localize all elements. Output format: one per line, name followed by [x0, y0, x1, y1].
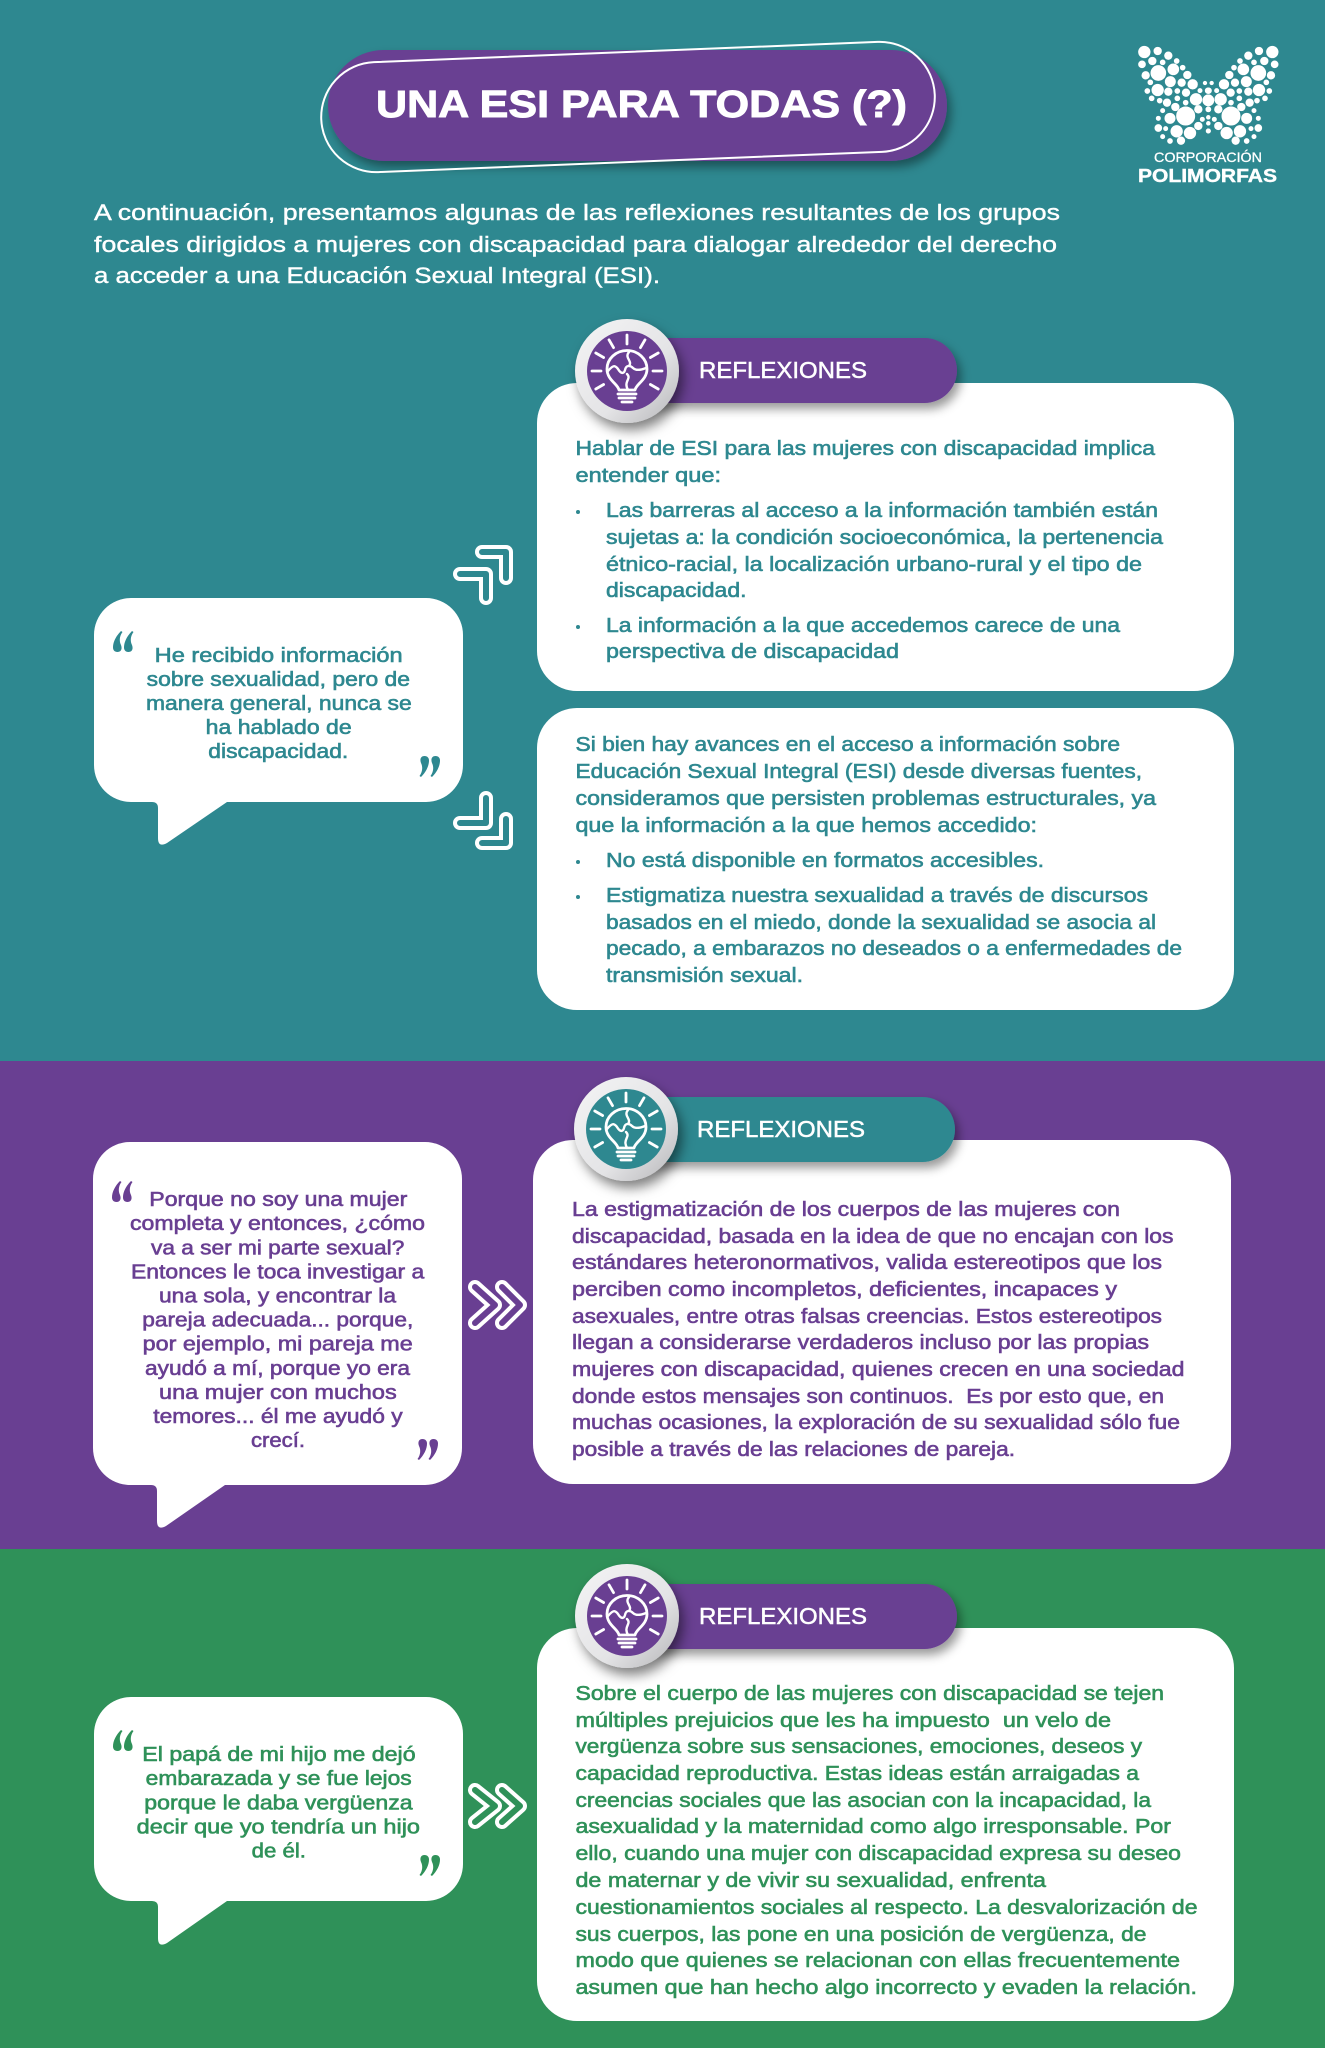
- panel: reflection box 3: llegan a considerarse verdaderos incluso por las propias: [572, 1332, 1149, 1354]
- panel: reflection box 4: capacidad reproductiva. Estas ideas están arraigadas a: [576, 1763, 1140, 1785]
- panel: reflection box 2: basados en el miedo, donde la sexualidad se asocia al: [606, 912, 1156, 934]
- quote bubble 3: de él.: [252, 1840, 306, 1862]
- title banner: [319, 40, 947, 174]
- panel: reflection box 2: Estigmatiza nuestra sexualidad a través de discursos: [606, 885, 1148, 907]
- quote bubble 3: porque le daba vergüenza: [144, 1792, 414, 1814]
- panel: reflection box 1: [537, 383, 1234, 691]
- panel: reflection box 2: que la información a la que hemos accedido:: [576, 815, 1037, 837]
- heading: reflexiones badge 2: [574, 1077, 955, 1181]
- arrow: double chevron purple section: [475, 1287, 520, 1323]
- panel: reflection box 2: consideramos que persisten problemas estructurales, ya: [576, 788, 1157, 810]
- panel: reflection box 2: Educación Sexual Integral (ESI) desde diversas fuentes,: [576, 761, 1142, 783]
- intro text: A continuación, presentamos algunas de las reflexiones resultantes de los grupos: [94, 200, 1060, 225]
- quote bubble 2: una mujer con muchos: [159, 1382, 397, 1404]
- panel: reflection box 3: muchas ocasiones, la exploración de su sexualidad sólo fue: [572, 1412, 1180, 1434]
- quote bubble 3: [94, 1697, 463, 1945]
- panel: reflection box 2: Si bien hay avances en el acceso a información sobre: [576, 734, 1120, 756]
- quote bubble 3: decir que yo tendría un hijo: [137, 1816, 420, 1838]
- panel: reflection box 1: La información a la que accedemos carece de una: [606, 615, 1121, 637]
- panel: reflection box 1: sujetas a: la condición socioeconómica, la pertenencia: [606, 527, 1164, 549]
- panel: reflection box 4: creencias sociales que las asocian con la incapacidad, la: [576, 1790, 1152, 1812]
- panel: reflection box 2: [537, 708, 1234, 1010]
- panel: reflection box 1: perspectiva de discapacidad: [606, 641, 899, 663]
- panel: reflection box 4: asexualidad y la maternidad como algo irresponsable. Por: [576, 1816, 1171, 1838]
- panel: reflection box 3: donde estos mensajes son continuos. Es por esto que, en: [572, 1386, 1164, 1408]
- quote bubble 2: una sola, y encontrar la: [159, 1286, 397, 1308]
- panel: reflection box 4: asumen que han hecho algo incorrecto y evaden la relación.: [576, 1977, 1197, 1999]
- arrow: down-right double corner: [460, 798, 506, 843]
- arrow: up-right double corner: [460, 552, 506, 598]
- quote bubble 2: ayudó a mí, porque yo era: [145, 1358, 411, 1380]
- panel: reflection box 2: pecado, a embarazos no deseados o a enfermedades de: [606, 938, 1182, 960]
- heading: reflexiones badge 3: REFLEXIONES: [699, 1603, 867, 1629]
- quote bubble 1: manera general, nunca se: [146, 693, 412, 715]
- heading: reflexiones badge 3: [575, 1564, 957, 1668]
- quote bubble 2: [93, 1142, 462, 1528]
- panel: reflection box 4: vergüenza sobre sus sensaciones, emociones, deseos y: [576, 1736, 1142, 1758]
- panel: reflection box 4: múltiples prejuicios que les ha impuesto un velo de: [576, 1710, 1111, 1732]
- quote bubble 2: Porque no soy una mujer: [149, 1189, 408, 1211]
- quote bubble 2: Entonces le toca investigar a: [131, 1261, 425, 1283]
- heading: reflexiones badge 1: REFLEXIONES: [699, 357, 867, 383]
- panel: reflection box 4: de maternar y de vivir su sexualidad, enfrenta: [576, 1870, 1047, 1892]
- quote bubble 1: sobre sexualidad, pero de: [147, 669, 410, 691]
- panel: reflection box 3: discapacidad, basada en la idea de que no encajan con los: [572, 1226, 1174, 1248]
- panel: reflection box 1: Hablar de ESI para las mujeres con discapacidad implica: [576, 438, 1156, 460]
- panel: reflection box 2: No está disponible en formatos accesibles.: [606, 850, 1044, 872]
- intro text: [94, 200, 1060, 288]
- panel: reflection box 3: asexuales, entre otras falsas creencias. Estos estereotipos: [572, 1306, 1162, 1328]
- panel: reflection box 4: [537, 1628, 1234, 2021]
- panel: reflection box 4: sus cuerpos, las pone en una posición de vergüenza, de: [576, 1924, 1146, 1946]
- panel: reflection box 3: perciben como incompletos, deficientes, incapaces y: [572, 1279, 1117, 1301]
- panel: purple section background: [0, 1061, 1325, 1549]
- heading: reflexiones badge 2: REFLEXIONES: [697, 1116, 865, 1142]
- quote bubble 2: va a ser mi parte sexual?: [151, 1237, 404, 1259]
- logo: Corporación Polimorfas: [1138, 46, 1278, 186]
- panel: reflection box 1: Las barreras al acceso a la información también están: [606, 500, 1158, 522]
- panel: reflection box 4: modo que quienes se relacionan con ellas frecuentemente: [576, 1950, 1180, 1972]
- panel: reflection box 4: cuestionamientos sociales al respecto. La desvalorización de: [576, 1897, 1198, 1919]
- panel: reflection box 4: Sobre el cuerpo de las mujeres con discapacidad se tejen: [576, 1683, 1164, 1705]
- arrow: double chevron green section: [475, 1790, 520, 1822]
- intro text: a acceder a una Educación Sexual Integral (ESI).: [94, 263, 660, 288]
- panel: reflection box 3: La estigmatización de los cuerpos de las mujeres con: [572, 1199, 1120, 1221]
- quote bubble 1: [94, 598, 463, 845]
- quote bubble 1: ha hablado de: [206, 717, 352, 739]
- panel: reflection box 3: posible a través de las relaciones de pareja.: [572, 1439, 1015, 1461]
- quote bubble 2: por ejemplo, mi pareja me: [143, 1334, 413, 1356]
- heading: reflexiones badge 1: [575, 319, 957, 423]
- quote bubble 2: pareja adecuada... porque,: [142, 1310, 413, 1332]
- quote bubble 3: El papá de mi hijo me dejó: [142, 1744, 416, 1766]
- quote bubble 2: crecí.: [251, 1430, 305, 1452]
- logo: Corporación Polimorfas: CORPORACIÓN: [1154, 150, 1262, 165]
- quote bubble 2: completa y entonces, ¿cómo: [130, 1213, 425, 1235]
- panel: reflection box 3: mujeres con discapacidad, quienes crecen en una sociedad: [572, 1359, 1184, 1381]
- panel: teal section background: [0, 0, 1325, 1061]
- panel: reflection box 4: ello, cuando una mujer con discapacidad expresa su deseo: [576, 1843, 1181, 1865]
- panel: reflection box 2: transmisión sexual.: [606, 965, 803, 987]
- quote bubble 2: temores... él me ayudó y: [153, 1406, 403, 1428]
- intro text: focales dirigidos a mujeres con discapacidad para dialogar alrededor del derecho: [94, 232, 1057, 257]
- quote bubble 1: discapacidad.: [208, 741, 348, 763]
- panel: reflection box 3: [533, 1140, 1231, 1484]
- quote bubble 3: embarazada y se fue lejos: [146, 1768, 412, 1790]
- title banner: UNA ESI PARA TODAS (?): [376, 84, 907, 126]
- quote bubble 1: He recibido información: [155, 645, 403, 667]
- panel: green section background: [0, 1549, 1325, 2048]
- panel: reflection box 3: estándares heteronormativos, valida estereotipos que los: [572, 1252, 1162, 1274]
- logo: Corporación Polimorfas: POLIMORFAS: [1138, 166, 1277, 186]
- panel: reflection box 1: étnico-racial, la localización urbano-rural y el tipo de: [606, 554, 1142, 576]
- panel: reflection box 1: discapacidad.: [606, 580, 746, 602]
- panel: reflection box 1: entender que:: [576, 465, 721, 487]
